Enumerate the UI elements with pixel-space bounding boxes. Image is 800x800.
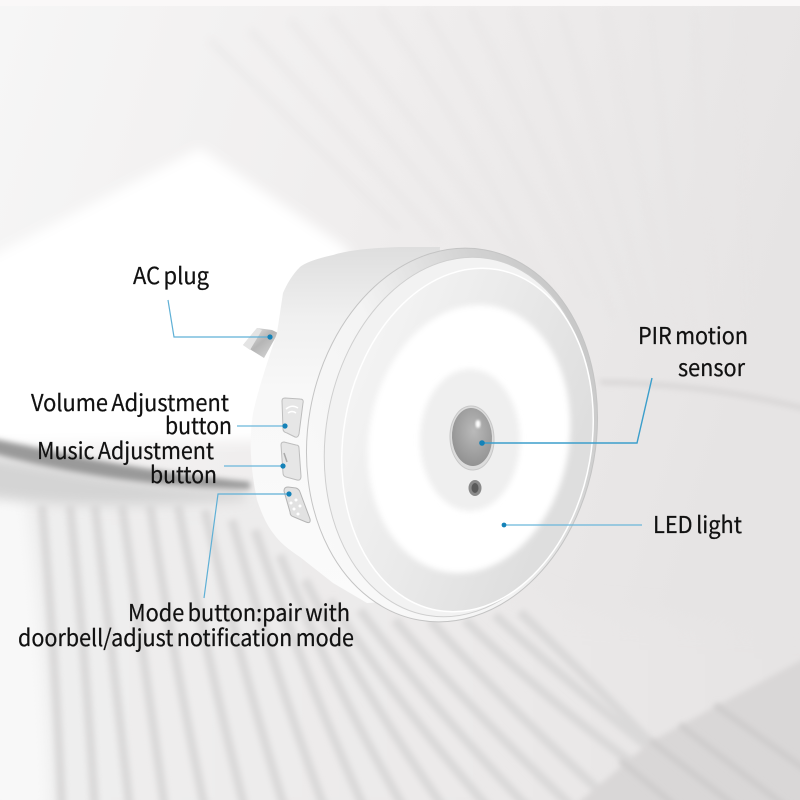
white wedge behind labels — [0, 148, 350, 445]
callout: PIR motion sensor: sensor — [678, 349, 745, 383]
callout: Mode button: doorbell/adjust notification mode — [18, 619, 354, 653]
lower stripes — [42, 505, 665, 800]
bottom-right wedge — [570, 650, 800, 800]
outer rim — [278, 225, 626, 645]
callout: Volume Adjustment button: Volume Adjustment — [31, 384, 229, 418]
icon: AC plug pin — [243, 328, 278, 358]
dark swoosh — [0, 455, 245, 505]
lower left panel — [0, 492, 800, 800]
housing back — [251, 247, 440, 603]
face plate — [315, 248, 620, 632]
callout: Music Adjustment button: Music Adjustment — [37, 432, 214, 466]
callout: Volume Adjustment button: button — [165, 407, 232, 441]
LED ring glow — [347, 289, 591, 589]
callout: LED light: LED light — [653, 506, 742, 540]
PIR sensor lens — [448, 405, 496, 471]
callout: Music Adjustment button: button — [150, 456, 217, 490]
callout: LED light — [502, 506, 742, 540]
product: plug-in night light — [243, 225, 626, 645]
volume button — [282, 398, 303, 437]
callout: Mode button: Mode button:pair with — [128, 594, 350, 628]
callout: AC plug — [133, 257, 273, 340]
callout: PIR motion sensor — [479, 317, 748, 446]
callout: Mode button — [18, 491, 354, 653]
middle ring — [297, 236, 619, 638]
callout: AC plug: AC plug — [133, 257, 209, 291]
callout: PIR motion sensor: PIR motion — [638, 317, 748, 351]
music button — [281, 442, 301, 480]
indicator sensor — [468, 480, 482, 496]
callout: Volume Adjustment button — [31, 384, 288, 441]
LED light inner disc — [420, 369, 520, 511]
mode button — [284, 487, 310, 523]
faint top stripes — [210, 10, 750, 350]
callout: Music Adjustment button — [37, 432, 286, 490]
